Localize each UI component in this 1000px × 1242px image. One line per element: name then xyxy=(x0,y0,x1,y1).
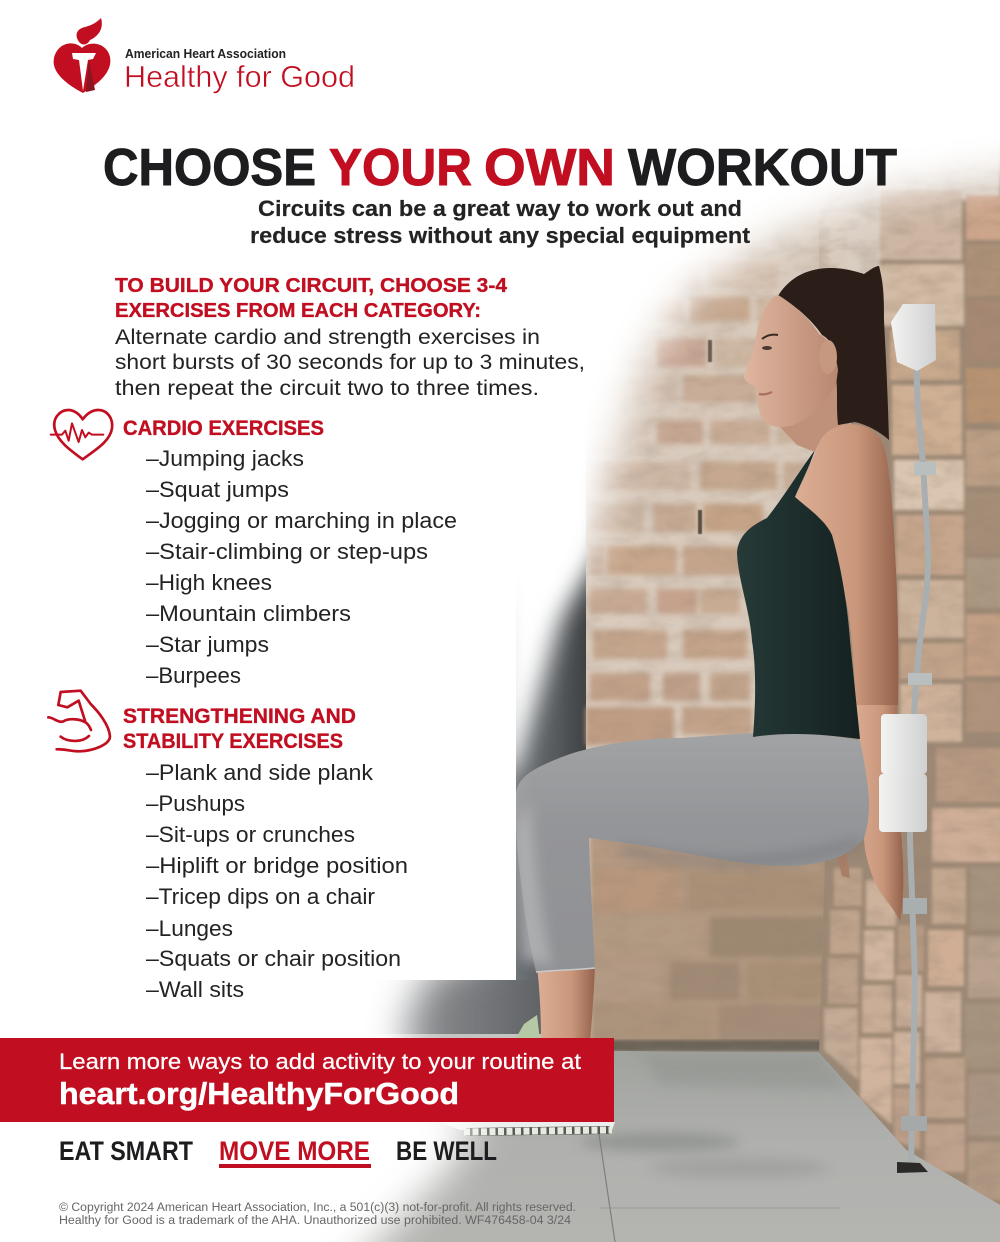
instructions text xyxy=(115,326,585,400)
copyright notice: © Copyright 2024 American Heart Association, Inc., a 501(c)(3) not-for-profit. All rights reserved. xyxy=(59,1202,576,1214)
logo text: Healthy for Good: Healthy for Good xyxy=(124,59,355,94)
concrete floor xyxy=(250,1048,1000,1242)
strengthening exercise list: –Wall sits xyxy=(146,977,244,1002)
cardio exercise list: –Jogging or marching in place xyxy=(146,508,457,533)
face xyxy=(744,295,838,427)
subtitle: Circuits can be a great way to work out and xyxy=(258,196,742,221)
arm and shoulder xyxy=(795,424,898,705)
strengthening heading: STRENGTHENING AND xyxy=(123,704,356,728)
logo: American Heart Association Healthy for Good xyxy=(54,18,355,94)
cardio heading: CARDIO EXERCISES xyxy=(123,416,324,440)
strengthening exercise list: –Hiplift or bridge position xyxy=(146,853,408,878)
cardio exercise list: –Burpees xyxy=(146,663,241,688)
cardio exercise list: –Mountain climbers xyxy=(146,601,351,626)
copyright notice: Healthy for Good is a trademark of the AHA. Unauthorized use prohibited. WF476458-04 3/24 xyxy=(59,1215,572,1227)
icon: heart with pulse line xyxy=(51,410,112,459)
title xyxy=(103,139,897,197)
call-to-action banner: Learn more ways to add activity to your routine at xyxy=(59,1049,581,1074)
shoe xyxy=(439,1122,615,1132)
strengthening heading: STABILITY EXERCISES xyxy=(123,729,343,753)
cardio exercise list: –Jumping jacks xyxy=(146,446,304,471)
strengthening heading xyxy=(123,704,356,753)
right brick wall xyxy=(819,100,1000,1205)
tagline: eat smart, move more, be well: MOVE MORE xyxy=(219,1136,370,1166)
strengthening exercise list: –Pushups xyxy=(146,791,245,816)
icon: heart and torch xyxy=(54,18,110,93)
subtitle xyxy=(250,196,751,248)
strengthening exercise list xyxy=(146,760,408,1002)
title: OWN xyxy=(484,139,615,197)
title: WORKOUT xyxy=(628,139,897,197)
cardio exercise list: –Star jumps xyxy=(146,632,269,657)
far hand and forearm xyxy=(852,700,903,921)
cardio exercise list: –Squat jumps xyxy=(146,477,289,502)
strengthening exercise list: –Plank and side plank xyxy=(146,760,374,785)
cardio exercise list: –High knees xyxy=(146,570,272,595)
cardio exercise list xyxy=(146,446,457,688)
back brick wall xyxy=(586,100,860,1060)
logo text: American Heart Association: American Heart Association xyxy=(125,46,286,61)
copyright notice xyxy=(59,1202,576,1227)
leggings xyxy=(516,732,869,972)
instructions heading: EXERCISES FROM EACH CATEGORY: xyxy=(115,299,481,322)
calf xyxy=(537,966,595,1042)
instructions heading: TO BUILD YOUR CIRCUIT, CHOOSE 3-4 xyxy=(115,274,508,297)
call-to-action banner xyxy=(0,1038,614,1122)
call-to-action banner: heart.org/HealthyForGood xyxy=(59,1076,459,1111)
instructions heading xyxy=(115,274,508,322)
icon: flexed bicep xyxy=(48,691,110,751)
window xyxy=(330,380,600,1050)
cardio exercise list: –Stair-climbing or step-ups xyxy=(146,539,428,564)
strengthening exercise list: –Squats or chair position xyxy=(146,946,401,971)
instructions text: then repeat the circuit two to three times. xyxy=(115,377,539,400)
wall outlets and conduit xyxy=(879,304,936,1173)
tagline: eat smart, move more, be well: BE WELL xyxy=(396,1136,497,1166)
title: YOUR xyxy=(329,139,472,197)
woman xyxy=(439,266,903,1132)
strengthening exercise list: –Tricep dips on a chair xyxy=(146,884,375,909)
far shoe toe xyxy=(516,1015,540,1040)
strengthening exercise list: –Lunges xyxy=(146,916,233,941)
tank top xyxy=(737,450,860,739)
hair xyxy=(778,266,889,440)
neck xyxy=(780,375,850,452)
subtitle: reduce stress without any special equipment xyxy=(250,223,751,248)
title: CHOOSE xyxy=(103,139,316,197)
tagline: eat smart, move more, be well xyxy=(59,1136,497,1168)
strengthening exercise list: –Sit-ups or crunches xyxy=(146,822,355,847)
instructions text: Alternate cardio and strength exercises in xyxy=(115,326,540,349)
instructions text: short bursts of 30 seconds for up to 3 minutes, xyxy=(115,351,585,374)
tagline: eat smart, move more, be well: EAT SMART xyxy=(59,1136,193,1166)
